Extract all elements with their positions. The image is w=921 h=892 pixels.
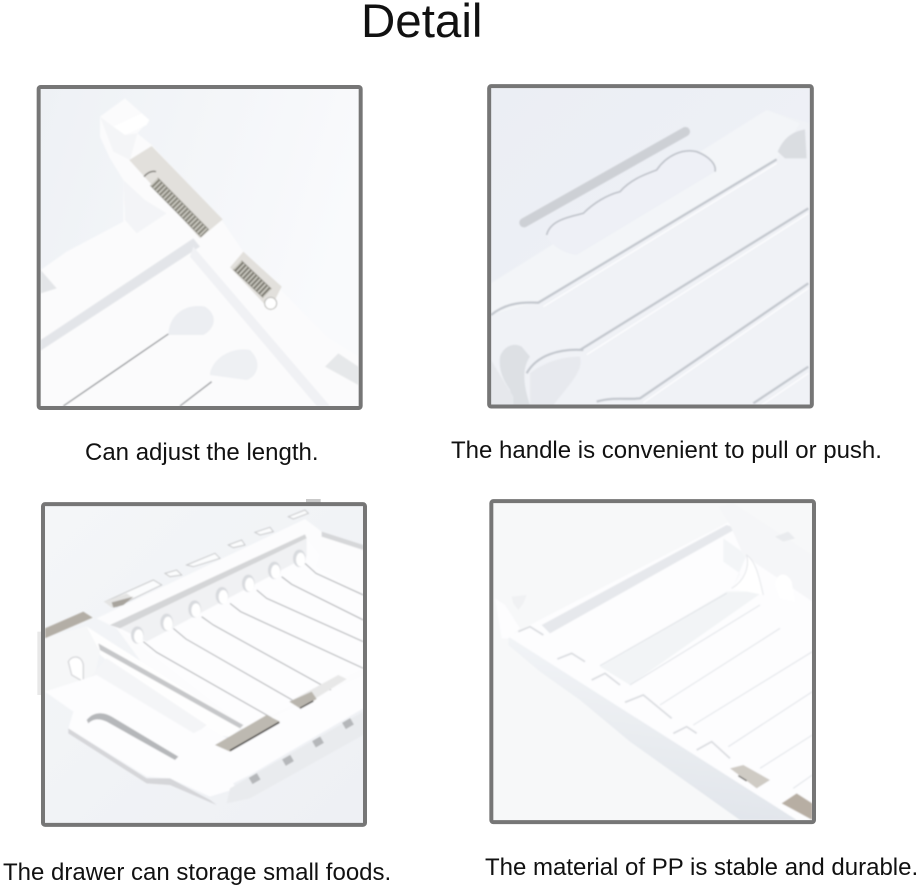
icon: tray slots	[131, 550, 306, 644]
caption: handle: The handle is convenient to pull or push.	[451, 437, 882, 464]
panel: drawer photo	[37, 499, 365, 825]
icon: floor slat lines	[600, 593, 812, 788]
icon: drawer back tabs	[105, 510, 308, 607]
icon: shelf rail and hook	[41, 98, 358, 406]
icon: lower left hook	[491, 345, 581, 405]
icon: shelf surface	[491, 110, 810, 405]
icon: right corner notch	[778, 129, 807, 158]
icon: metal clips	[104, 593, 347, 752]
icon: handle bar	[524, 132, 685, 223]
icon: faint overflow behind the frame	[37, 499, 321, 695]
icon: slat grooves	[491, 159, 808, 403]
icon: wavy grip cutout	[546, 150, 716, 236]
panel: PP material photo	[491, 501, 814, 822]
icon: right side wall	[197, 682, 363, 791]
caption: drawer: The drawer can storage small foods.	[3, 859, 391, 886]
panel: adjustable length photo	[39, 87, 361, 408]
icon: front bar and handle	[45, 612, 243, 805]
icon: metal clips	[730, 765, 812, 820]
icon: upper spring	[129, 146, 223, 238]
icon: rear cross bar	[732, 528, 794, 594]
icon: edge slots	[518, 627, 730, 758]
caption: adjust length: Can adjust the length.	[85, 439, 318, 466]
icon: tray floor	[542, 526, 805, 816]
caption: PP material: The material of PP is stable and durable.	[485, 854, 918, 881]
panel: handle photo	[489, 86, 812, 406]
icon: tray slat lines	[143, 563, 363, 728]
icon: lower spring	[230, 252, 282, 310]
icon: drawer tray body	[97, 519, 363, 728]
icon: front edge wall	[538, 668, 796, 820]
